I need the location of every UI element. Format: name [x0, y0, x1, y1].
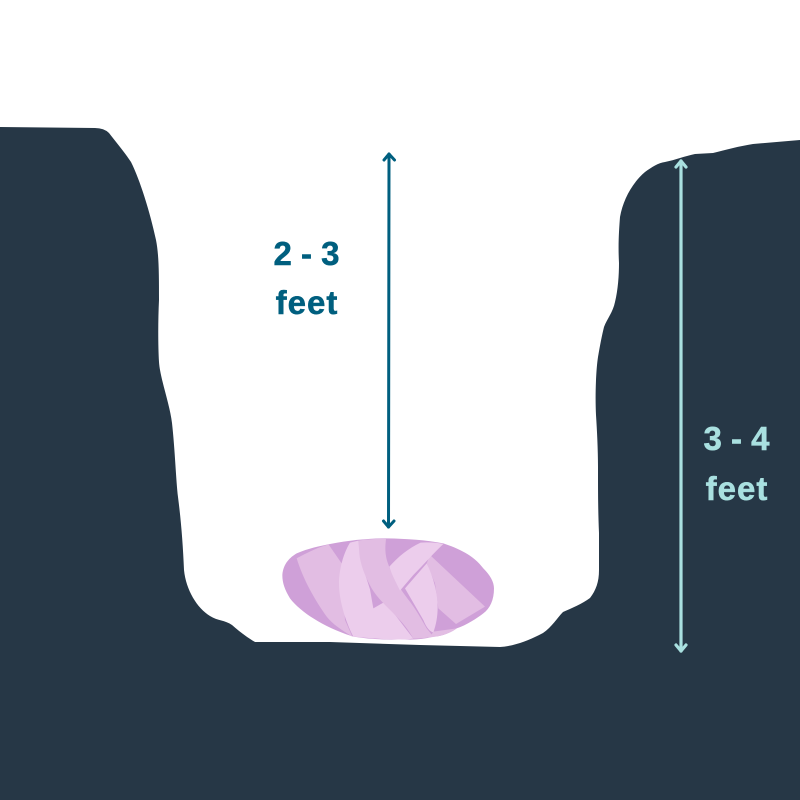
label: 2 - 3 feet: feet	[276, 284, 338, 321]
band tall light	[339, 541, 413, 639]
band left	[297, 545, 352, 637]
rock base	[282, 538, 494, 640]
label: 2 - 3 feet	[273, 235, 340, 321]
label: 2 - 3 feet: 2 - 3	[273, 235, 340, 272]
arrow: trench clearance	[384, 154, 394, 527]
band bottom right	[430, 628, 457, 637]
label: 3 - 4 feet: 3 - 4	[703, 420, 770, 457]
band right mid	[427, 555, 485, 624]
label: 3 - 4 feet	[703, 420, 770, 507]
arrow: trench depth	[676, 161, 686, 651]
band top right	[389, 542, 443, 591]
label: 3 - 4 feet: feet	[706, 470, 768, 507]
rock bundle	[282, 538, 494, 640]
band right light	[405, 563, 438, 632]
band top strip	[358, 539, 433, 639]
